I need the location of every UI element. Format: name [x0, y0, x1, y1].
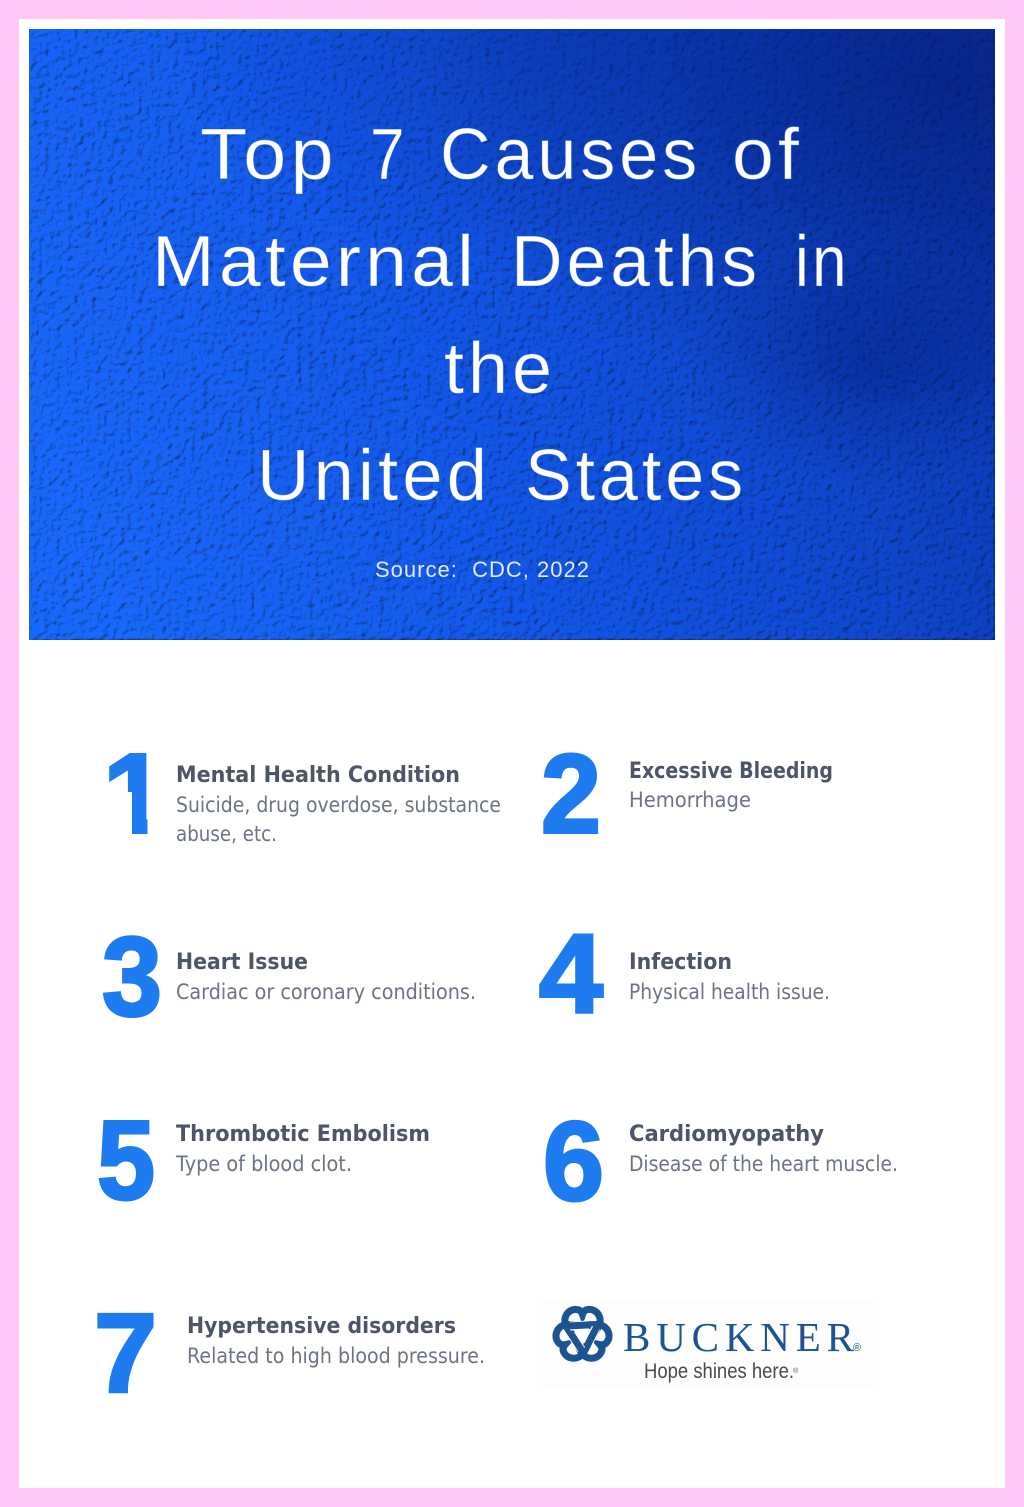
tagline registered mark: ® [793, 1367, 799, 1375]
item 6: Cardiomyopathy [629, 1121, 824, 1147]
item 6: 6 [543, 1099, 604, 1224]
title: 7 [370, 115, 408, 195]
wordmark: BUCKNER [623, 1314, 855, 1360]
item 6: Disease of the heart muscle. [629, 1152, 898, 1176]
item 2: Hemorrhage [629, 788, 751, 812]
title: Top [200, 115, 338, 195]
header panel: textured blue background [29, 29, 995, 640]
source line: Source: CDC, 2022 [375, 557, 589, 582]
tagline: Hope shines here. [644, 1360, 794, 1383]
logo: Buckner [543, 1300, 873, 1387]
title: Causes [440, 115, 701, 195]
title: States [525, 436, 747, 516]
item 7: Related to high blood pressure. [187, 1344, 485, 1368]
item 1: abuse, etc. [176, 822, 277, 846]
registered mark: ® [853, 1342, 861, 1354]
item 5 [97, 1098, 430, 1223]
item 2: Excessive Bleeding [629, 758, 833, 784]
title: United [257, 436, 491, 516]
title: Deaths [511, 222, 761, 302]
item 1 [109, 753, 500, 844]
item 3: Heart Issue [176, 949, 308, 975]
title: Maternal [152, 222, 478, 302]
item 3 [102, 914, 476, 1039]
item 7: 7 [94, 1290, 157, 1416]
item 2: 2 [541, 732, 601, 856]
item 3: 3 [102, 914, 162, 1039]
item 5: Type of blood clot. [175, 1152, 352, 1176]
item 6 [543, 1099, 898, 1224]
item 5: 5 [97, 1098, 155, 1223]
item 4 [539, 912, 830, 1036]
item 1: Suicide, drug overdose, substance [176, 793, 501, 817]
item 3: Cardiac or coronary conditions. [176, 980, 476, 1004]
title: in [795, 222, 850, 302]
item 7 [94, 1290, 485, 1416]
icon: interlaced hearts [552, 1309, 613, 1362]
item 7: Hypertensive disorders [187, 1313, 456, 1339]
title: the [444, 329, 556, 409]
title: of [732, 115, 803, 195]
title [152, 115, 850, 516]
item 2 [541, 732, 833, 856]
item 1: 1 [103, 730, 166, 856]
item 4: Physical health issue. [629, 980, 830, 1004]
item 1: Mental Health Condition [176, 762, 460, 788]
item 5: Thrombotic Embolism [176, 1121, 430, 1147]
item 4: 4 [539, 912, 603, 1036]
item 4: Infection [629, 949, 732, 975]
